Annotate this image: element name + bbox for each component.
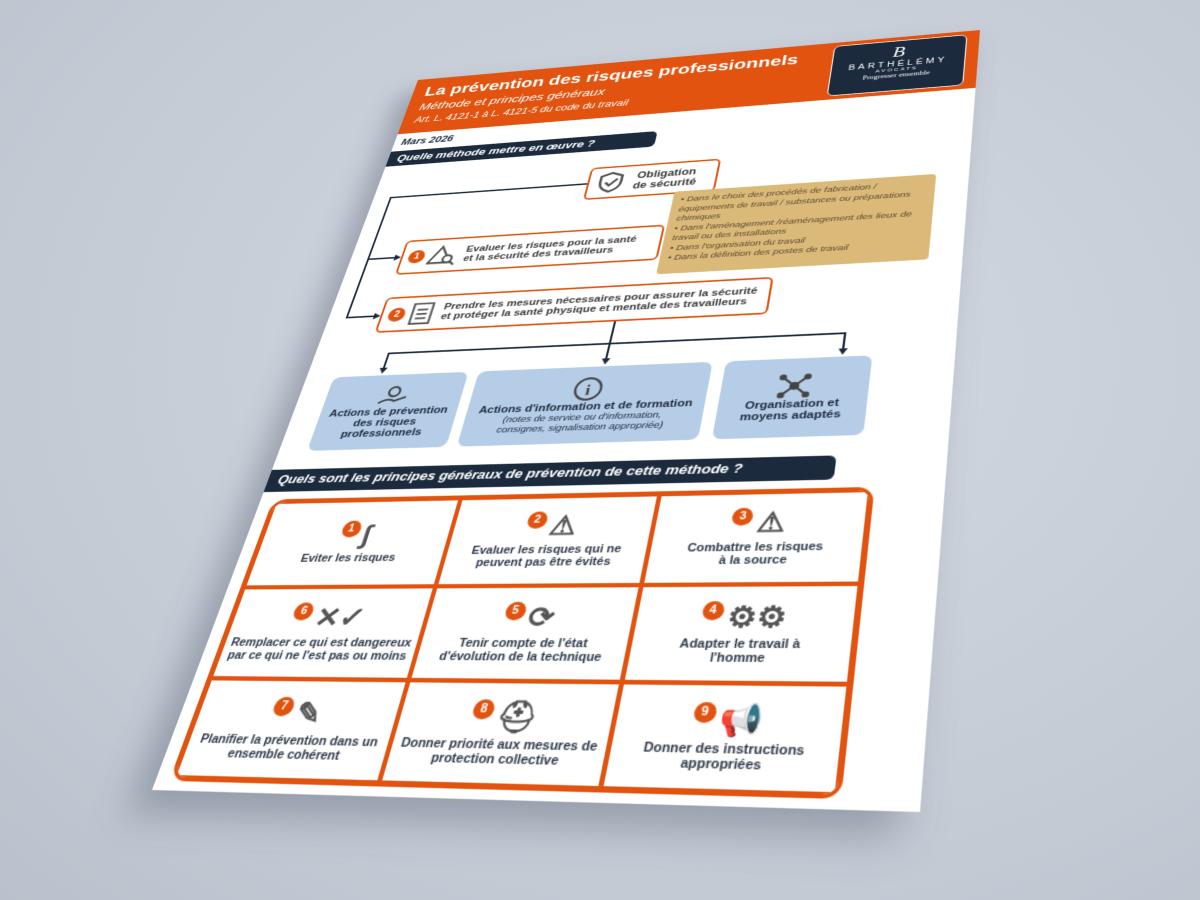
principle 1 <box>244 498 461 587</box>
principles grid <box>169 487 875 799</box>
tan details box: • Dans l'organisation du travail <box>669 236 806 253</box>
principle 8 <box>379 680 621 789</box>
article reference: Art. L. 4121-1 à L. 4121-5 du code du travail <box>413 98 629 125</box>
box: obligation de sécurité <box>583 159 721 200</box>
principle 2: 2 <box>533 515 542 526</box>
icon: hand gear <box>377 386 406 404</box>
principle 4: ⚙⚙ <box>725 600 789 634</box>
connector lines <box>345 183 848 374</box>
document page <box>152 30 980 812</box>
principle 5: 5 <box>511 605 520 617</box>
principle 2: ⚠ <box>546 510 580 541</box>
principle 1: ∫ <box>358 520 375 549</box>
icon: info: i <box>583 382 592 398</box>
blue box: actions de prévention: professionnels <box>339 427 423 440</box>
principle 4: 4 <box>708 604 717 617</box>
tan details box: • Dans le choix des procédés de fabrication / équipements de travail / substances ou préparations chimiques <box>676 183 911 223</box>
tan details box: • Dans l'aménagement /réaménagement des lieux de travail ou des installations <box>671 209 912 243</box>
box: obligation de sécurité: de sécurité <box>632 176 697 191</box>
principle 9: 9 <box>700 705 710 719</box>
principle 2: Evaluer les risques qui ne <box>470 543 622 557</box>
blue box: actions de prévention: des risques <box>351 416 418 429</box>
section heading 2: Quels sont les principes généraux de prévention de cette méthode ? <box>276 461 744 486</box>
principle 9: 📢 <box>717 701 766 738</box>
icon: warning magnifier <box>425 245 454 266</box>
title: La prévention des risques professionnels <box>423 52 799 99</box>
principle 9: Donner des instructions <box>642 740 805 758</box>
step 2 box <box>375 277 774 333</box>
principle 6: par ce qui ne l'est pas ou moins <box>225 649 408 663</box>
box: obligation de sécurité: Obligation <box>636 166 697 180</box>
principle 9 <box>600 682 849 795</box>
logo: BARTHÉLÉMY <box>848 56 948 72</box>
blue box: organisation: Organisation et <box>744 397 840 412</box>
blue box: information et formation <box>457 362 713 447</box>
icon: info <box>573 377 604 401</box>
principle 9: appropriées <box>679 756 762 773</box>
principle 5 <box>409 585 641 682</box>
principle 6: Remplacer ce qui est dangereux <box>229 636 413 650</box>
blue box: actions de prévention: Actions de prévention <box>328 405 449 419</box>
principle 1: Eviter les risques <box>299 552 397 565</box>
principle 7: ensemble cohérent <box>226 746 342 763</box>
logo: AVOCATS <box>875 66 918 74</box>
section heading 1 <box>386 131 658 167</box>
section heading 2 <box>264 455 837 492</box>
principle 3: 3 <box>738 511 747 523</box>
step 2 box: et protéger la santé physique et mentale des travailleurs <box>439 296 748 322</box>
principle 7 <box>174 679 409 783</box>
blue box: organisation: moyens adaptés <box>739 409 841 423</box>
principle 5: d'évolution de la technique <box>437 650 603 664</box>
blue box: information et formation: (notes de service ou d'information, <box>501 410 663 425</box>
logo: B <box>892 45 906 60</box>
date: Mars 2026 <box>400 134 455 147</box>
principle 3 <box>641 490 871 585</box>
principle 8: protection collective <box>429 751 560 768</box>
step 1 box <box>395 225 665 275</box>
principle 5: ⟳ <box>525 601 558 634</box>
principle 3: ⚠ <box>755 506 788 538</box>
tan details box <box>656 174 936 274</box>
blue box: information et formation: Actions d'information et de formation <box>477 398 693 416</box>
blue box: information et formation: consignes, signalisation appropriée) <box>495 420 664 435</box>
principle 3: à la source <box>718 554 788 568</box>
principle 7: Planifier la prévention dans un <box>198 732 380 749</box>
principle 2: peuvent pas être évités <box>474 556 612 570</box>
step 2 box: Prendre les mesures nécessaires pour assurer la sécurité <box>442 286 758 312</box>
principle 7: ✎ <box>291 696 327 730</box>
step 1 box: Evaluer les risques pour la santé <box>465 234 638 254</box>
logo <box>827 34 967 96</box>
header band <box>398 30 980 134</box>
subtitle: Méthode et principes généraux <box>418 86 606 113</box>
icon: checklist <box>407 302 436 326</box>
logo: Progresser ensemble <box>862 69 930 81</box>
principle 5: Tenir compte de l'état <box>457 637 589 651</box>
icon: shield <box>598 172 624 193</box>
blue box: organisation <box>712 355 872 439</box>
section heading 1: Quelle méthode mettre en œuvre ? <box>395 138 596 163</box>
principle 4: Adapter le travail à <box>679 637 801 652</box>
tan details box: • Dans la définition des postes de travail <box>667 243 849 263</box>
principle 7: 7 <box>279 700 290 712</box>
step 2 box: 2 <box>393 310 401 319</box>
principle 1: 1 <box>346 524 356 535</box>
principle 6: 6 <box>299 606 309 617</box>
principle 4 <box>621 583 860 685</box>
step 1 box: 1 <box>412 252 421 261</box>
principle 6 <box>210 586 436 680</box>
blue box: actions de prévention <box>307 372 469 451</box>
principle 6: ✕✓ <box>311 601 369 633</box>
principle 4: l'homme <box>709 651 766 665</box>
principle 8: 8 <box>479 702 489 715</box>
principle 8: ⛑ <box>493 698 542 734</box>
principle 3: Combattre les risques <box>686 541 824 555</box>
principle 8: Donner priorité aux mesures de <box>399 736 599 754</box>
principle 2 <box>436 494 659 586</box>
icon: network <box>776 373 812 399</box>
step 1 box: et la sécurité des travailleurs <box>462 245 614 263</box>
